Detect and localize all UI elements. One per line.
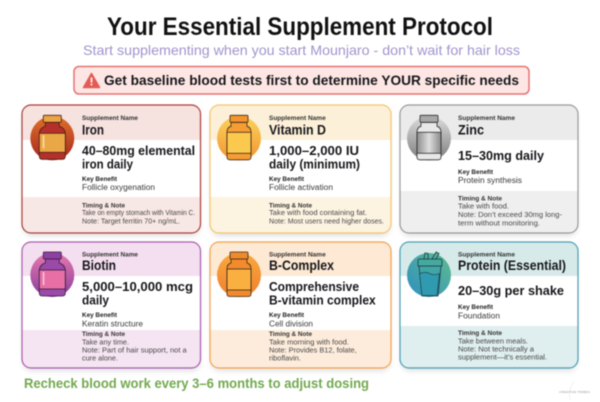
supplement text: daily	[82, 292, 110, 307]
supplement text: Supplement Name	[82, 252, 138, 259]
supplement text: iron daily	[82, 156, 134, 171]
supplement text: daily (minimum)	[269, 156, 360, 171]
supplement text: B-Complex	[269, 257, 334, 273]
supplement text	[458, 252, 566, 362]
supplement text: Take any time.	[82, 339, 129, 346]
footer note: Recheck blood work every 3–6 months to adjust dosing	[24, 375, 369, 391]
supplement text: 15–30mg daily	[458, 148, 545, 163]
panel: biotin	[22, 242, 201, 371]
panel: iron	[22, 105, 201, 236]
supplement text: Note: Target ferritin 70+ ng/mL.	[82, 218, 180, 225]
supplement text: Key Benefit	[458, 304, 494, 311]
supplement text: Follicle activation	[269, 183, 333, 192]
supplement text: 40–80mg elemental	[82, 143, 195, 158]
supplement text: Key Benefit	[269, 176, 305, 183]
supplement text: Timing & Note	[269, 331, 312, 338]
panel: protein	[400, 242, 578, 371]
supplement text: Protein synthesis	[458, 176, 522, 185]
supplement text: Zinc	[458, 121, 484, 137]
supplement text: supplement—it’s essential.	[458, 355, 547, 362]
supplement text: Take on empty stomach with Vitamin C.	[82, 210, 195, 217]
icon: b-complex bottle	[217, 252, 261, 297]
supplement text: Timing & Note	[458, 196, 502, 203]
supplement text: Protein (Essential)	[458, 257, 566, 273]
supplement text: Supplement Name	[269, 252, 326, 259]
supplement text: Timing & Note	[82, 203, 125, 210]
supplement text: Key Benefit	[82, 176, 118, 183]
supplement text: Timing & Note	[82, 331, 125, 338]
subtitle: Start supplementing when you start Mounjaro - don’t wait for hair loss	[83, 42, 520, 58]
supplement text: Take with food containing fat.	[269, 210, 367, 217]
supplement text: 20–30g per shake	[458, 283, 564, 298]
supplement text: 1,000–2,000 IU	[269, 143, 359, 158]
supplement text: B-vitamin complex	[269, 292, 376, 307]
supplement text: Timing & Note	[269, 203, 312, 210]
supplement text: Cell division	[269, 319, 313, 328]
supplement text	[82, 115, 195, 225]
supplement text: Follicle oxygenation	[82, 183, 155, 192]
supplement text: Timing & Note	[458, 330, 502, 337]
icon: protein shaker	[407, 252, 451, 297]
supplement text: Key Benefit	[458, 169, 494, 176]
supplement text	[82, 252, 193, 362]
supplement text: Biotin	[82, 257, 116, 273]
title: Your Essential Supplement Protocol	[107, 13, 493, 41]
logo mark: CREATIVE TRIBES	[559, 390, 590, 394]
panel: vitamin d	[210, 105, 391, 236]
supplement text	[458, 115, 563, 228]
supplement text: Take with food.	[458, 204, 509, 211]
supplement text: Take morning with food.	[269, 339, 349, 346]
alert banner	[74, 66, 529, 94]
supplement text: cure alone.	[82, 355, 118, 362]
supplement text: Foundation	[458, 311, 500, 320]
supplement text: Note: Part of hair support, not a	[82, 347, 187, 354]
supplement text: 5,000–10,000 mcg	[82, 279, 193, 294]
icon: zinc bottle	[407, 115, 451, 160]
supplement text	[269, 115, 384, 225]
supplement text: Iron	[82, 121, 104, 137]
supplement text: Supplement Name	[269, 115, 326, 122]
supplement text: Keratin structure	[82, 319, 144, 328]
supplement text: Key Benefit	[82, 312, 118, 319]
panel: zinc	[400, 105, 578, 236]
alert text: Get baseline blood tests first to determine YOUR specific needs	[104, 72, 519, 88]
panel: b-complex	[210, 242, 391, 371]
supplement text: Note: Don’t exceed 30mg long-	[458, 212, 563, 219]
supplement text: Note: Most users need higher doses.	[269, 218, 384, 225]
supplement text: Comprehensive	[269, 279, 359, 294]
supplement text: Take between meals.	[458, 338, 528, 345]
supplement text: Supplement Name	[458, 115, 515, 122]
supplement text: Key Benefit	[269, 312, 305, 319]
supplement text: Note: Provides B12, folate,	[269, 347, 357, 354]
supplement text	[269, 252, 376, 362]
supplement text: Supplement Name	[82, 115, 138, 122]
icon: biotin bottle	[30, 252, 74, 297]
supplement text: Supplement Name	[458, 252, 515, 259]
icon: warning triangle	[84, 74, 100, 88]
logo mark	[559, 382, 590, 400]
icon: vitamin d bottle	[217, 115, 261, 160]
supplement text: Vitamin D	[269, 121, 326, 137]
icon: iron bottle	[30, 115, 74, 160]
supplement text: riboflavin.	[269, 355, 301, 362]
supplement text: term without monitoring.	[458, 220, 540, 228]
supplement text: Note: Not technically a	[458, 347, 534, 354]
